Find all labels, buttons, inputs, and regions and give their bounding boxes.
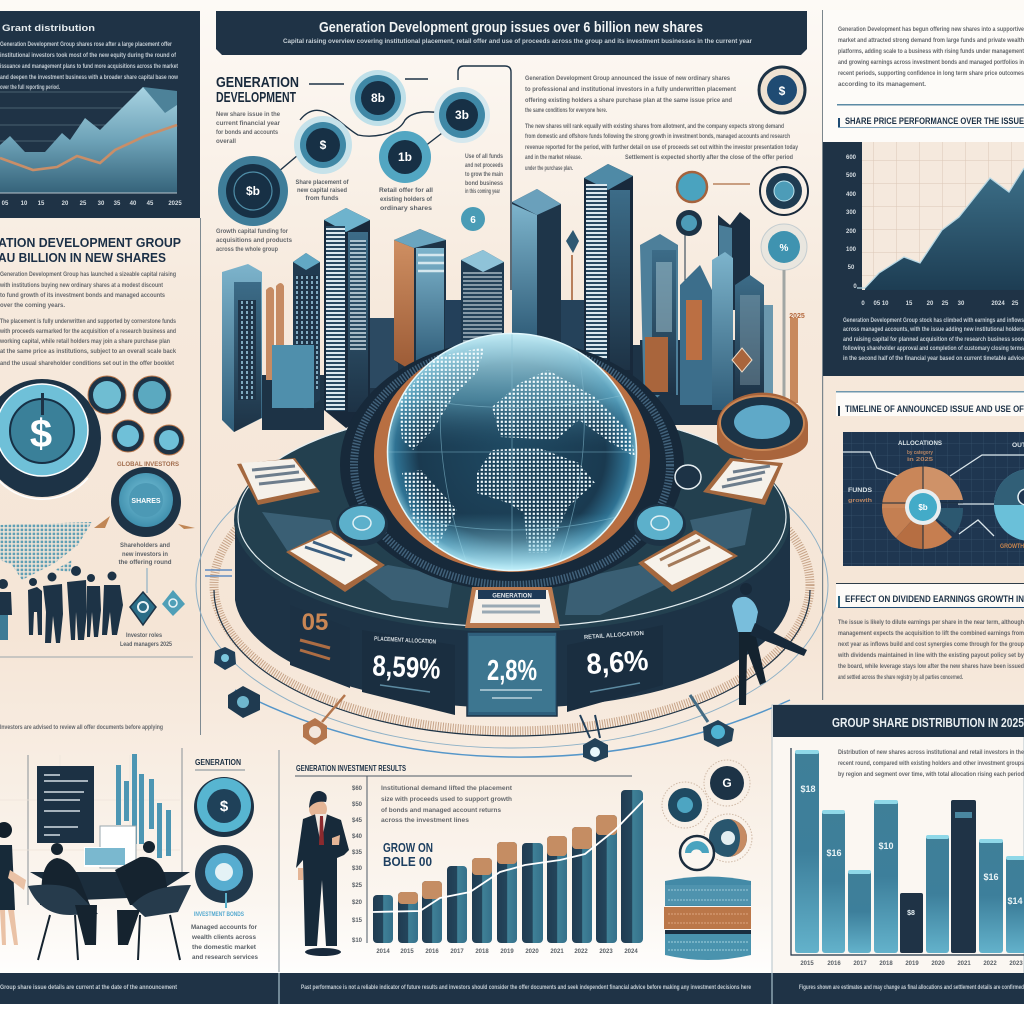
panel text: over the full reporting period.: [0, 84, 60, 91]
icon: step four: 3b: [455, 108, 469, 122]
diamond marker: [732, 348, 752, 372]
axis labels: $30: [352, 866, 363, 872]
chart callout: BOLE 00: [383, 854, 432, 869]
panel: round badges column: Managed accounts for: [191, 925, 258, 931]
caption middle: Retail offer for all: [379, 188, 433, 194]
body text: to fund growth of its investment bonds and managed accounts: [0, 292, 165, 299]
footer band: [0, 973, 1024, 1004]
area chart: 05: [2, 201, 9, 207]
desk and chairs: [28, 841, 191, 960]
top centre text: under the purchase plan.: [525, 165, 573, 172]
caption: Shareholders and: [120, 543, 170, 549]
top centre text: The new shares will rank equally with existing shares from allotment, and the company expects strong demand: [525, 123, 784, 130]
stat panel: 8,59%: 8,59%: [372, 650, 441, 686]
block heading: [216, 74, 299, 106]
chart text: across the investment lines: [381, 817, 469, 824]
panel text: Generation Development Group shares rose after a large placement offer: [0, 41, 172, 48]
tower 5: [461, 250, 504, 345]
icon: small teal badge: 6: [470, 215, 476, 226]
axis labels: $50: [352, 802, 363, 808]
area chart: 45: [147, 201, 154, 207]
caption middle: existing holders of: [380, 197, 433, 203]
axis labels: $10: [352, 938, 363, 944]
x labels: 2015: [400, 949, 414, 955]
tower 6: [512, 189, 561, 345]
executive figure: [296, 791, 349, 956]
headline: ATION DEVELOPMENT GROUP: [0, 235, 181, 250]
skyline: 2025: [789, 313, 805, 320]
bars: 2019: [905, 961, 919, 967]
panel: share price chart: 200: [846, 229, 857, 235]
panel: round badges column: and research services: [192, 955, 259, 961]
panel: share price chart: 15: [906, 301, 913, 307]
area chart: 30: [98, 201, 105, 207]
panel heading: Grant distribution: [2, 23, 95, 34]
card: left front report: [286, 530, 385, 592]
caption left: Share placement of: [296, 180, 349, 186]
icon group: top right badges: [566, 67, 808, 400]
panel: share price chart: 600: [846, 155, 857, 161]
panel: pie chart: FUNDS: [848, 488, 872, 494]
panel: round badges column: the domestic market: [192, 945, 256, 951]
caption middle: [379, 188, 433, 212]
caption right stack: Use of all funds: [465, 153, 503, 160]
area chart: 40: [130, 201, 137, 207]
panel: share price chart: 25: [942, 301, 949, 307]
headline: [0, 235, 181, 265]
axis labels: $15: [352, 918, 363, 924]
heading: GENERATION: [195, 758, 241, 767]
footer band: Group share issue details are current at the date of the announcement: [0, 984, 178, 991]
measurement rings: [196, 422, 828, 757]
panel: pie chart: growth: [848, 498, 872, 504]
card: left rear book: [237, 458, 320, 505]
icon: step two: [294, 116, 352, 174]
caption lower left: acquisitions and products: [216, 237, 292, 244]
body text: with proceeds earmarked for the acquisition of a research business and: [0, 328, 176, 335]
body text: with institutions buying new ordinary shares at a modest discount: [0, 282, 164, 289]
node markers: [214, 647, 734, 762]
body text: [0, 271, 176, 367]
x labels: 2019: [500, 949, 514, 955]
bars: $10: [878, 841, 894, 851]
tower 9: [718, 212, 750, 310]
area chart: 20: [62, 201, 69, 207]
platform wall panel: 05: 05: [302, 609, 328, 636]
panel: share price chart: 20: [927, 301, 934, 307]
icon: dollar: [194, 777, 254, 837]
body text: at the same price as institutions, subject to an overall scale back: [0, 348, 176, 355]
monitor: [37, 766, 94, 843]
caption lower left: [216, 228, 292, 253]
panel: share price chart: 0: [853, 284, 857, 290]
panel text: issuance and management plans to fund more acquisitions across the market: [0, 63, 179, 70]
panel: share price chart: 2024: [991, 301, 1005, 307]
area chart: 10: [21, 201, 28, 207]
body text: and the usual shareholder conditions set out in the offer booklet: [0, 360, 175, 367]
top centre text: to professional and institutional investors in a fully underwritten placement: [525, 86, 737, 93]
section heading: use of funds: [836, 391, 1024, 416]
body text: over the coming years.: [0, 302, 65, 309]
top centre text: Generation Development Group announced the issue of new ordinary shares: [525, 75, 730, 82]
x labels: 2020: [525, 949, 539, 955]
stat panel: 2,8%: 2,8%: [487, 655, 537, 687]
panel: pie chart: by category: [907, 450, 933, 456]
icon group: top right badges: %: [780, 243, 789, 254]
chart text: size with proceeds used to support growth: [381, 796, 512, 803]
icon: step three: 8b: [371, 91, 385, 105]
area chart: [0, 87, 182, 207]
tower 8: [640, 234, 678, 410]
top centre text: offering existing holders a share purchase plan at the same issue price and: [525, 97, 732, 104]
top centre text: from domestic and offshore funds following the strong growth in investment bonds, managed accounts and research: [525, 133, 790, 140]
laptop screen: [84, 826, 136, 868]
tower 7: [584, 164, 633, 387]
axis labels: $20: [352, 900, 363, 906]
panel: share price chart: 500: [846, 173, 857, 179]
caption right stack: in this coming year: [465, 188, 500, 195]
card: centre: GENERATION: [492, 594, 532, 600]
block text: overall: [216, 138, 236, 145]
panel: share price chart: 05 10: [873, 301, 889, 307]
area chart: 2025: [168, 201, 182, 207]
impact text: and settled across the share registry by all parties concerned.: [838, 674, 963, 681]
bars: 2020: [931, 961, 945, 967]
panel: right column: [822, 10, 1024, 700]
icon: coin stack: [664, 876, 751, 960]
chart text: Institutional demand lifted the placement: [381, 785, 513, 792]
x labels: 2022: [574, 949, 588, 955]
panel: share distribution bars: [772, 705, 1024, 975]
chart text: [381, 785, 513, 824]
axis labels: $45: [352, 818, 363, 824]
block text: for bonds and accounts: [216, 129, 278, 136]
card: right front report: [638, 530, 738, 592]
connector stem: [146, 568, 148, 593]
card: centre: [465, 587, 560, 628]
caption right stack: [465, 153, 503, 195]
body text: working capital, while retail holders may join a share purchase plan: [0, 338, 170, 345]
panel: share price chart: 0: [861, 301, 865, 307]
panel: pie chart: in 2025: [907, 457, 933, 463]
circular platform with globe: [196, 328, 828, 762]
panel: share price chart: 25: [1012, 301, 1019, 307]
caption lower left: Growth capital funding for: [216, 228, 288, 235]
panel: share price chart: 50: [848, 265, 855, 271]
panel: share price chart: 300: [846, 210, 857, 216]
icon group: small round badges: [88, 376, 184, 455]
icon: step two: $: [320, 138, 327, 152]
dotted world map: [0, 522, 92, 580]
caption: [118, 543, 172, 566]
bars: 2015: [800, 961, 814, 967]
bars: 2016: [827, 961, 841, 967]
block text: [216, 111, 280, 145]
panel: share price chart: 400: [846, 192, 857, 198]
x labels: 2023: [599, 949, 613, 955]
platform top: [234, 408, 790, 632]
stat panel: 2,8%: [467, 632, 557, 716]
top centre text: [525, 75, 798, 172]
chart callout: [383, 840, 433, 869]
woman standing: [0, 822, 26, 945]
body text: Generation Development Group has launched a sizeable capital raising: [0, 271, 176, 278]
icon: dial: [195, 845, 253, 908]
title banner: Capital raising overview covering institutional placement, retail offer and use of proceeds across the group and its investment businesses in the current year: [283, 38, 752, 45]
caption right stack: bond business: [465, 180, 503, 187]
panel: executive and bar chart: [279, 750, 644, 972]
tower 12: [735, 275, 764, 400]
footnote: Investors are advised to review all offer documents before applying: [0, 724, 163, 731]
bars: $8: [907, 910, 915, 917]
x labels: [376, 949, 638, 955]
axis labels: $60: [352, 786, 363, 792]
caption: [120, 633, 173, 648]
axis labels: $40: [352, 834, 363, 840]
caption left: from funds: [306, 196, 339, 202]
icon group: small bubbles: [662, 760, 752, 870]
dotted continents: [398, 347, 635, 553]
right intro copy: according to its management.: [838, 81, 926, 88]
bars: 2021: [957, 961, 971, 967]
bars: 2023: [1009, 961, 1023, 967]
top centre text: and in the market release.: [525, 154, 582, 161]
icon group: small bubbles: G: [722, 776, 732, 790]
caption: Investor roles: [126, 633, 163, 639]
platform sub-panels: [262, 508, 752, 615]
tower 3: [324, 208, 370, 428]
tower 4: [394, 229, 446, 375]
bar panel header: [773, 705, 1024, 737]
platform wall panel: 05: [290, 605, 350, 688]
top centre text: the same conditions for everyone here.: [525, 107, 607, 114]
panel text: institutional investors took most of the new equity during the round of: [0, 52, 177, 59]
bars: $16: [983, 872, 999, 882]
block heading: GENERATION: [216, 74, 299, 91]
bars: [791, 748, 1024, 967]
panel: round badges column: [191, 758, 259, 961]
panel: share price chart: 100: [846, 247, 857, 253]
icon: small teal badge: [461, 207, 485, 231]
small label: GLOBAL INVESTORS: [117, 462, 179, 468]
x labels: 2014: [376, 949, 390, 955]
icon: step three: [350, 70, 406, 126]
panel: team scene: [0, 748, 191, 960]
chart callout: GROW ON: [383, 840, 433, 855]
person with pointer: [732, 583, 807, 705]
area chart: 25: [80, 201, 87, 207]
icon: step five: [379, 131, 431, 183]
diamond icons: [130, 590, 185, 625]
stat panel: 8,6%: RETAIL ALLOCATION: [584, 631, 644, 641]
caption: new investors in: [122, 552, 168, 558]
medallion right: [634, 504, 686, 546]
block text: New share issue in the: [216, 111, 280, 118]
stat panel: 8,59%: PLACEMENT ALLOCATION: [374, 636, 436, 646]
skyline: [222, 164, 805, 432]
panel: share price chart: 30: [958, 301, 965, 307]
medallion left: [336, 504, 388, 546]
blue bars behind: [116, 754, 171, 858]
icon: large dollar dial: [0, 379, 101, 499]
bars: 2022: [983, 961, 997, 967]
top centre text: revenue reported for the period, with further detail on use of proceeds set out within the investor presentation today: [525, 144, 798, 151]
icon: dollar: $: [220, 798, 229, 815]
x labels: 2018: [475, 949, 489, 955]
chart text: of bonds and managed account returns: [381, 807, 501, 814]
bars: $14: [1007, 896, 1023, 906]
icon: step four: [434, 87, 490, 143]
block text: current financial year: [216, 120, 280, 127]
panel: generation development block: [216, 66, 511, 290]
icon: step one: [218, 156, 288, 226]
caption left: new capital raised: [297, 188, 347, 194]
panel text: and deepen the investment business with a broader share capital base now: [0, 74, 178, 81]
stat panel: 8,6%: [567, 625, 663, 712]
disc: copper world map: [717, 393, 808, 460]
panel: top-left chart: [0, 11, 200, 218]
tower 11: [712, 252, 733, 410]
caption right stack: and net proceeds: [465, 162, 503, 169]
bars: $16: [826, 848, 842, 858]
capsule marker: [675, 465, 701, 489]
bar chart: [373, 790, 644, 943]
caption: the offering round: [118, 560, 172, 566]
headline: AU BILLION IN NEW SHARES: [0, 250, 166, 265]
area chart: 15: [38, 201, 45, 207]
area chart: 35: [114, 201, 121, 207]
right intro copy: [838, 26, 1024, 88]
tower 2: [293, 253, 320, 410]
bars: $18: [800, 784, 816, 794]
stat panel: 8,59%: [362, 630, 455, 715]
block heading: DEVELOPMENT: [216, 89, 296, 106]
copper ring: [374, 340, 650, 572]
title banner: [216, 11, 807, 55]
skyline base filler: [262, 340, 770, 430]
panel: left column story: [0, 218, 201, 735]
bars: 2017: [853, 961, 867, 967]
axis labels: $35: [352, 850, 363, 856]
caption middle: ordinary shares: [380, 206, 433, 212]
icon: blue dial with arrows: [94, 467, 195, 537]
badge caption: INVESTMENT BONDS: [194, 912, 244, 918]
panel: pie chart: $b: [918, 503, 928, 512]
bar panel text: [838, 749, 1024, 778]
icon: blue dial with arrows: SHARES: [131, 498, 161, 505]
x labels: 2024: [624, 949, 638, 955]
body text: The placement is fully underwritten and supported by cornerstone funds: [0, 318, 176, 325]
panel: pie chart: ALLOCATIONS: [898, 440, 943, 447]
caption right stack: to grow the main: [465, 171, 503, 178]
axis labels: $25: [352, 883, 363, 889]
process connectors: [278, 66, 511, 290]
axis labels: [352, 786, 363, 944]
x labels: 2016: [425, 949, 439, 955]
card: right rear book: [703, 458, 783, 505]
platform wall: [235, 520, 790, 708]
section heading: impact: [836, 583, 1024, 608]
icon: step five: 1b: [398, 150, 412, 164]
panel: pie chart: [843, 432, 1024, 566]
x labels: 2021: [550, 949, 564, 955]
tower 10: [680, 265, 712, 405]
caption left: [296, 180, 349, 202]
panel text: [0, 41, 179, 91]
people group: [0, 566, 123, 643]
icon: step one: $b: [246, 184, 260, 198]
bars: 2018: [879, 961, 893, 967]
impact text: [837, 619, 1024, 681]
title banner: Generation Development group issues over 6 billion new shares: [319, 19, 703, 36]
panel: share price chart: [823, 142, 1024, 376]
stat panel: 8,6%: 8,6%: [585, 645, 650, 681]
heading: GENERATION INVESTMENT RESULTS: [296, 763, 406, 773]
footer band: Past performance is not a reliable indicator of future results and investors should consider the offer documents and seek independent financial advice before making any investment decisions here: [301, 984, 751, 991]
tower 1: [222, 264, 262, 432]
icon group: top right badges: $: [779, 84, 786, 98]
panel: round badges column: wealth clients across: [191, 935, 257, 941]
icon: large dollar dial: $: [30, 412, 52, 456]
intro background: [823, 10, 1024, 142]
globe: [387, 328, 637, 576]
caption lower left: across the whole group: [216, 246, 278, 253]
inner dark ring: [340, 339, 684, 591]
top centre text: Settlement is expected shortly after the close of the offer period: [625, 154, 793, 161]
x labels: 2017: [450, 949, 464, 955]
caption: Lead managers 2025: [120, 642, 173, 648]
